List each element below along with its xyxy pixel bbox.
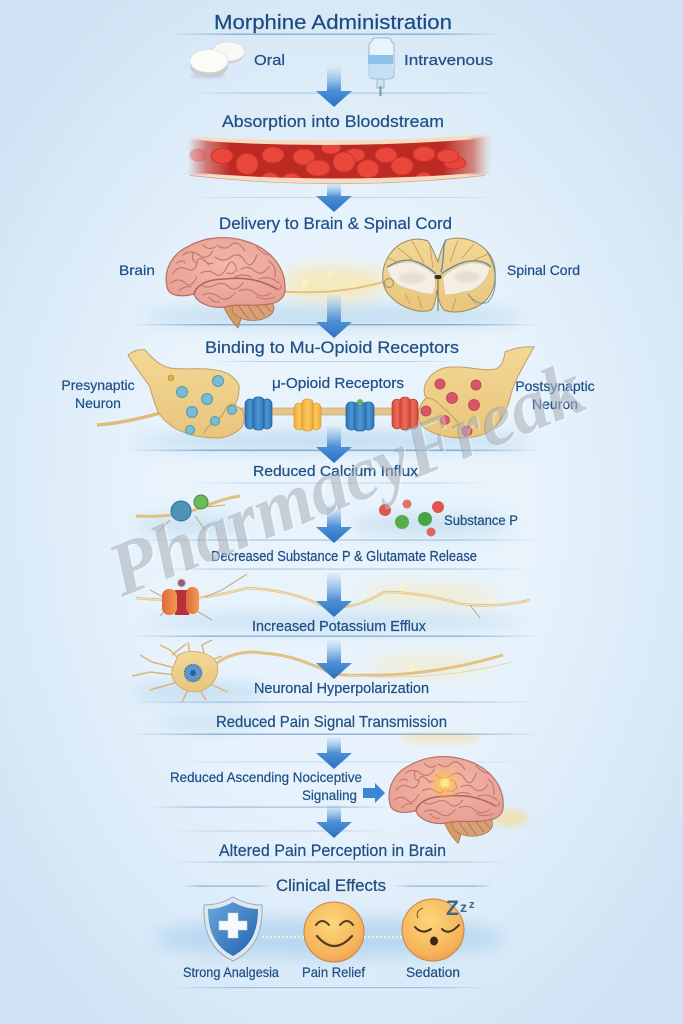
icon: smiling face: [304, 902, 364, 962]
potassium channel: [162, 579, 199, 615]
icon: sleep Zzz: z: [469, 899, 475, 911]
arrow: absorption to delivery: [316, 184, 352, 212]
label: reduced ascending nociceptive signaling: Reduced Ascending Nociceptive: [170, 769, 362, 785]
heading: neuronal hyperpolarization: Neuronal Hyperpolarization: [254, 681, 429, 697]
divider: below release: [150, 568, 530, 570]
label: pain relief: Pain Relief: [302, 965, 365, 980]
icon: sleep Zzz: z: [460, 899, 467, 915]
icon: spinal cord cross-section: [383, 238, 495, 312]
substance P molecules: [379, 500, 444, 536]
divider: perception top: [170, 830, 390, 832]
label: oral: Oral: [254, 52, 285, 69]
divider: administration: [190, 92, 500, 94]
label: presynaptic neuron: Presynaptic: [61, 377, 135, 393]
receptor: blue with ligand: [346, 399, 374, 431]
divider: calcium: [190, 482, 490, 484]
watermark: PharmacyFreak: [98, 347, 598, 614]
divider: perception: [170, 862, 510, 863]
arrow: delivery to binding: [316, 295, 352, 338]
heading: decreased substance P: Decreased Substance P & Glutamate Release: [211, 549, 477, 565]
label: brain: Brain: [119, 262, 155, 278]
divider: binding: [210, 361, 460, 362]
icon: brain with glowing pain centre: [389, 757, 503, 843]
neuron illustration: [132, 640, 512, 702]
label: postsynaptic neuron: Postsynaptic: [515, 378, 595, 394]
heading: reduced calcium influx: Reduced Calcium Influx: [253, 463, 419, 480]
heading: clinical effects: Clinical Effects: [276, 876, 386, 895]
title: Morphine Administration: [214, 12, 452, 34]
arrow: release to potassium: [316, 573, 352, 617]
divider: pain signal: [130, 734, 540, 735]
heading: reduced pain signal: Reduced Pain Signal Transmission: [216, 714, 447, 731]
blood vessel: [185, 134, 492, 184]
label: receptors: μ-Opioid Receptors: [272, 376, 404, 392]
soft background clouds: [130, 266, 534, 958]
icon: brain: [166, 238, 285, 328]
potassium nerve fibre: [136, 574, 530, 620]
label: presynaptic neuron: Neuron: [75, 395, 121, 411]
divider: bloodstream: [185, 197, 505, 198]
heading: binding: Binding to Mu-Opioid Receptors: [205, 338, 459, 357]
arrow: administration to absorption: [316, 68, 352, 107]
label: spinal cord: Spinal Cord: [507, 262, 580, 278]
arrow: calcium to release: [316, 505, 352, 543]
label: strong analgesia: Strong Analgesia: [183, 965, 279, 980]
heading: absorption: Absorption into Bloodstream: [222, 112, 444, 131]
arrow: signaling to brain: [363, 783, 385, 803]
label: intravenous: Intravenous: [404, 52, 493, 69]
receptor: red: [392, 397, 418, 430]
receptor: blue: [245, 397, 272, 430]
divider: potassium: [130, 636, 540, 637]
heading: delivery: Delivery to Brain & Spinal Cord: [219, 214, 452, 233]
heading: increased potassium efflux: Increased Potassium Efflux: [252, 619, 427, 635]
icon: sleeping face: [402, 899, 464, 961]
icon: sleep Zzz: [446, 897, 475, 920]
receptor: yellow: [294, 399, 321, 431]
divider: delivery: [128, 324, 540, 325]
watermark: PharmacyFreak: [96, 346, 596, 613]
arrow: binding to calcium: [316, 427, 352, 463]
connector dots between effects: [262, 936, 404, 938]
arrow: pain signal to ascending: [316, 737, 352, 769]
divider: release: [130, 540, 540, 541]
icon: IV bag: [368, 38, 394, 96]
presynaptic bouton with vesicles: [128, 350, 244, 438]
arrow: ascending to perception: [316, 805, 352, 838]
calcium channel with molecules on nerve: [136, 495, 240, 532]
label: postsynaptic neuron: Neuron: [532, 396, 578, 412]
label: reduced ascending nociceptive signaling: Signaling: [302, 787, 357, 803]
nerve connection with sparkles: [283, 273, 388, 294]
synapse: connecting axon: [97, 408, 426, 425]
divider: ascending top: [170, 762, 530, 763]
divider: hyperpolarization: [130, 702, 540, 703]
arrow: potassium to hyperpolarization: [316, 640, 352, 679]
divider: title: [170, 34, 500, 35]
icon: sleep Zzz: Z: [446, 897, 459, 920]
divider: effects: [170, 987, 490, 988]
icon: oral tablets: [190, 42, 244, 78]
postsynaptic bouton with vesicles: [419, 347, 534, 438]
label: substance P: Substance P: [444, 513, 518, 528]
icon: shield: [204, 897, 262, 961]
divider: ascending bottom: [150, 806, 390, 808]
label: sedation: Sedation: [406, 965, 460, 980]
divider: synapse: [128, 450, 540, 451]
heading: altered pain perception: Altered Pain Perception in Brain: [219, 842, 446, 860]
